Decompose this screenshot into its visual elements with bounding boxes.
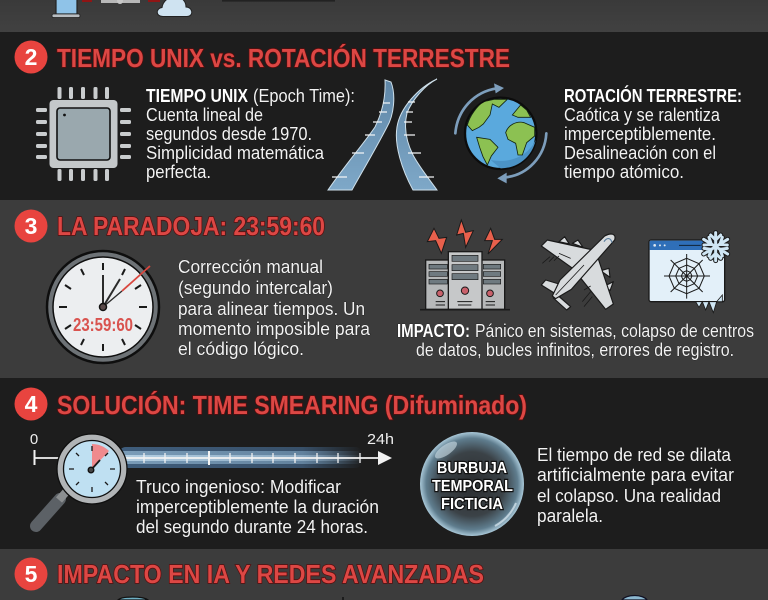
panel: section 5 AI and networks	[0, 549, 768, 600]
icon: temporal bubble: FICTICIA	[441, 496, 503, 513]
icon: temporal bubble: TEMPORAL	[432, 478, 513, 495]
badge: number 4: 4	[25, 391, 38, 417]
text: smearing trick: imperceptiblemente la duración	[136, 497, 379, 517]
text: Tiempo Unix: Simplicidad matemática	[146, 143, 325, 163]
text: dilated network time: artificialmente para evitar	[537, 465, 734, 485]
icon: diverging roads	[328, 79, 437, 190]
icon: temporal bubble	[420, 432, 524, 536]
icon: servers with lightning	[420, 220, 510, 310]
icon: magnifier with clock	[36, 434, 127, 526]
text: paradox description: momento imposible para	[178, 319, 371, 339]
badge: number 5	[14, 558, 48, 590]
text: Rotación terrestre: imperceptiblemente.	[564, 124, 716, 144]
icon: cut-off globe	[622, 596, 647, 600]
text: Rotación terrestre: Caótica y se ralentiza	[564, 105, 721, 125]
text: Tiempo Unix: Cuenta lineal de	[146, 105, 263, 125]
badge: number 3: 3	[25, 213, 37, 239]
text: Tiempo Unix: segundos desde 1970.	[146, 124, 312, 144]
badge: number 2: 2	[25, 44, 37, 70]
panel: section 1 remainder	[0, 0, 768, 32]
badge: number 2	[14, 40, 48, 74]
text: paradox description: para alinear tiempos. Un	[178, 299, 365, 319]
icon: clock 23:59:60	[47, 251, 159, 363]
icon: airplane	[541, 234, 615, 310]
text: Rotación terrestre: tiempo atómico.	[564, 162, 684, 182]
text: Rotación terrestre	[564, 85, 742, 182]
text: impact description	[397, 321, 754, 360]
icon: rotating earth	[455, 83, 546, 183]
panel: section 2 Unix vs rotation	[14, 40, 741, 190]
heading: section 2: TIEMPO UNIX vs. ROTACIÓN TERRESTRE	[57, 43, 510, 73]
text: paradox description: el código lógico.	[178, 339, 304, 359]
icon: cut-off antenna	[342, 597, 344, 600]
text: impact description: de datos, bucles infinitos, errores de registro.	[416, 340, 734, 360]
text: Tiempo Unix: perfecta.	[146, 162, 211, 182]
cut-off caption text	[222, 0, 335, 2]
badge: number 3	[14, 210, 48, 242]
badge: number 5: 5	[25, 561, 38, 587]
text: impact description: IMPACTO:	[397, 321, 470, 341]
text: dilated network time: El tiempo de red se dilata	[537, 445, 732, 465]
text: smearing trick	[136, 477, 379, 537]
icon: laptop	[52, 0, 80, 18]
panel: section 4 time smearing	[0, 378, 768, 549]
text: dilated network time: el colapso. Una realidad	[537, 486, 721, 506]
text: dilated network time: paralela.	[537, 506, 603, 526]
chart: 24 hour timeline: 0	[30, 431, 38, 448]
text: paradox description: Corrección manual	[178, 257, 323, 277]
text: smearing trick: Truco ingenioso: Modificar	[136, 477, 341, 497]
panel: section 3 paradox	[0, 200, 768, 378]
icon: frozen browser with cobweb	[649, 233, 728, 313]
heading: section 4: SOLUCIÓN: TIME SMEARING (Difuminado)	[57, 390, 527, 420]
heading: section 3: LA PARADOJA: 23:59:60	[57, 211, 325, 241]
text: Tiempo Unix: TIEMPO UNIX	[146, 86, 248, 106]
icon: microchip	[36, 87, 131, 181]
text: Tiempo Unix	[146, 86, 355, 182]
text: paradox description: (segundo intercalar)	[178, 278, 333, 298]
text: Rotación terrestre: Desalineación con el	[564, 143, 716, 163]
text: Tiempo Unix: (Epoch Time):	[253, 86, 355, 106]
network link pieces	[82, 0, 160, 4]
icon: temporal bubble: BURBUJA	[437, 460, 507, 477]
text: dilated network time	[537, 445, 734, 526]
icon: cut-off circle	[118, 597, 148, 600]
badge: number 4	[14, 388, 48, 420]
icon: clock 23:59:60: 23:59:60	[73, 315, 133, 335]
chart: 24 hour timeline: 24h	[367, 431, 394, 448]
chart: 24 hour timeline	[30, 431, 394, 468]
heading: section 5: IMPACTO EN IA Y REDES AVANZADAS	[57, 559, 484, 589]
text: smearing trick: del segundo durante 24 horas.	[136, 517, 368, 537]
text: paradox description	[178, 257, 371, 359]
icon: cloud	[157, 0, 192, 16]
